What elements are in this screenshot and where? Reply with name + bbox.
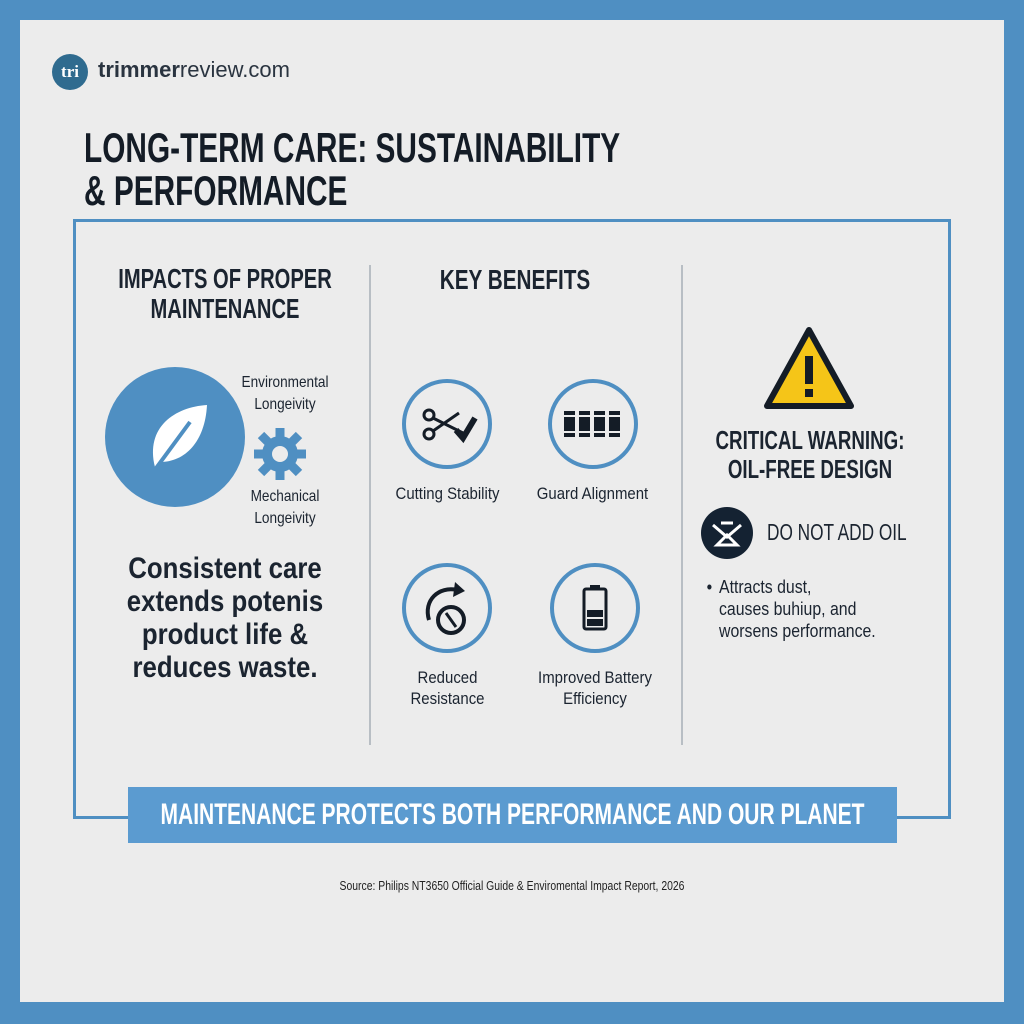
panel: warning: • bbox=[707, 577, 712, 597]
text: bullet: worsens performance. bbox=[719, 621, 876, 641]
title bbox=[84, 124, 620, 214]
text: consistent care: product life & bbox=[142, 618, 308, 651]
heading: impacts bbox=[118, 263, 332, 324]
icon: leaf circle bbox=[105, 367, 245, 507]
icon: logo badge: tri bbox=[61, 62, 79, 81]
site name: trimmerreview.com bbox=[98, 57, 290, 82]
text: bullet bbox=[707, 577, 876, 641]
title: LONG-TERM CARE: SUSTAINABILITY bbox=[84, 124, 620, 171]
benefit: battery bbox=[538, 563, 652, 708]
heading: critical warning: CRITICAL WARNING: bbox=[716, 425, 904, 455]
label: environmental bbox=[242, 374, 328, 413]
heading: critical warning bbox=[716, 425, 904, 484]
panel: warning bbox=[701, 327, 907, 641]
benefit: reduced resistance: Reduced bbox=[418, 668, 477, 687]
panel: impacts bbox=[105, 263, 332, 684]
benefit: cutting stability bbox=[396, 379, 500, 503]
icon: logo badge bbox=[52, 54, 88, 90]
banner bbox=[128, 787, 897, 843]
heading: impacts: MAINTENANCE bbox=[151, 293, 299, 324]
text: consistent care: Consistent care bbox=[128, 552, 322, 585]
text: consistent care: reduces waste. bbox=[132, 651, 318, 684]
benefit: cutting stability: Cutting Stability bbox=[396, 484, 499, 503]
text: consistent care: extends potenis bbox=[127, 585, 323, 618]
label: mechanical: Mechanical bbox=[251, 488, 319, 505]
benefit: battery: Improved Battery bbox=[538, 668, 652, 687]
benefit: guard alignment: Guard Alignment bbox=[537, 484, 648, 503]
source: Source: Philips NT3650 Official Guide & Enviromental Impact Report, 2026 bbox=[340, 878, 684, 893]
main panel frame bbox=[73, 219, 951, 819]
heading: critical warning: OIL-FREE DESIGN bbox=[728, 454, 892, 484]
logo bbox=[52, 54, 290, 90]
title: & PERFORMANCE bbox=[84, 167, 347, 214]
benefit: guard alignment bbox=[537, 379, 648, 503]
heading: impacts: IMPACTS OF PROPER bbox=[118, 263, 332, 294]
label: mechanical bbox=[251, 488, 319, 527]
label: environmental: Longeivity bbox=[254, 396, 316, 413]
banner: MAINTENANCE PROTECTS BOTH PERFORMANCE AND OUR PLANET bbox=[161, 798, 864, 831]
icon: no oil bbox=[701, 507, 753, 559]
benefit: reduced resistance bbox=[402, 563, 492, 708]
label: mechanical: Longeivity bbox=[254, 510, 316, 527]
heading: key benefits: KEY BENEFITS bbox=[440, 264, 590, 295]
icon: gear bbox=[254, 428, 306, 480]
icon: warning triangle bbox=[764, 327, 854, 409]
benefit: battery: Efficiency bbox=[563, 689, 627, 708]
text: bullet: causes buhiup, and bbox=[719, 599, 856, 619]
panel: key benefits bbox=[396, 264, 652, 708]
text: bullet: Attracts dust, bbox=[719, 577, 811, 597]
text: do not add oil: DO NOT ADD OIL bbox=[767, 519, 907, 545]
text: consistent care bbox=[127, 552, 323, 684]
label: environmental: Environmental bbox=[242, 374, 328, 391]
benefit: reduced resistance: Resistance bbox=[410, 689, 485, 708]
